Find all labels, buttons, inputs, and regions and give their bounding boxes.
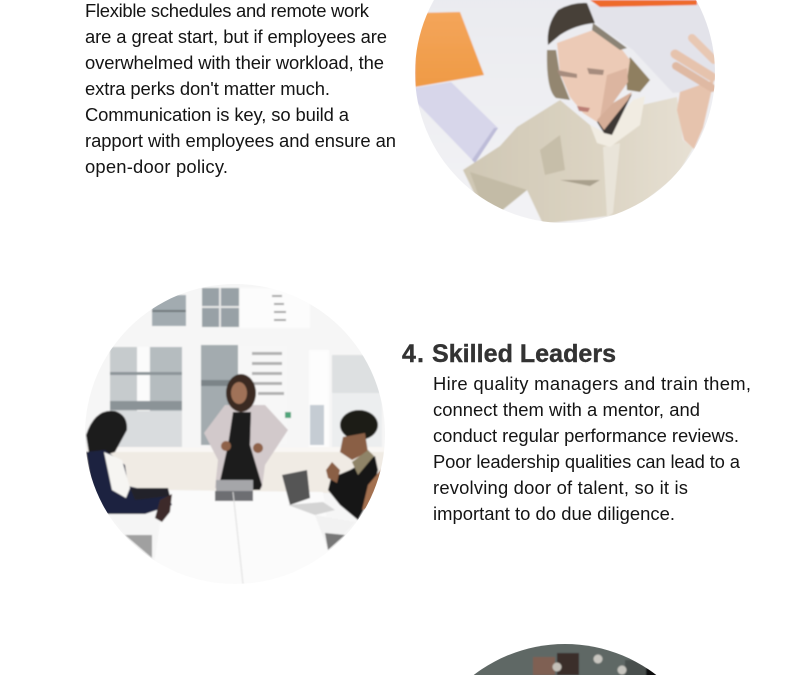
text block: workload paragraph: Communication is key, so build a bbox=[85, 104, 350, 125]
text block: skilled leaders paragraph: Poor leadership qualities can lead to a bbox=[433, 451, 741, 472]
face bbox=[557, 30, 630, 122]
woman left bbox=[86, 411, 127, 460]
text block: skilled leaders paragraph: important to do due diligence. bbox=[433, 503, 675, 524]
text block: workload paragraph: overwhelmed with their workload, the bbox=[85, 52, 384, 73]
photo: team meeting around a table bbox=[80, 280, 390, 600]
laptop bbox=[282, 470, 335, 515]
table bbox=[168, 490, 323, 494]
shirt bbox=[463, 97, 693, 224]
curls bbox=[626, 57, 650, 92]
heading: 4. Skilled Leaders: Skilled Leaders bbox=[432, 340, 616, 368]
hair bbox=[548, 3, 595, 45]
text block: workload paragraph: Flexible schedules and remote work bbox=[85, 0, 370, 21]
text block: workload paragraph: extra perks don't matter much. bbox=[85, 78, 330, 99]
collar bbox=[590, 96, 645, 147]
text block: skilled leaders paragraph: Hire quality managers and train them, bbox=[433, 373, 751, 394]
tablet bbox=[215, 480, 253, 501]
text block: skilled leaders paragraph: conduct regular performance reviews. bbox=[433, 425, 739, 446]
text block: skilled leaders paragraph: connect them with a mentor, and bbox=[433, 399, 700, 420]
photo: dark interior with lights (cut off at bottom) bbox=[474, 644, 656, 675]
text block: workload paragraph bbox=[85, 0, 396, 177]
woman standing bbox=[204, 405, 288, 488]
text block: workload paragraph: are a great start, but if employees are bbox=[85, 26, 387, 47]
hand and fingers bbox=[677, 80, 714, 149]
text block: skilled leaders paragraph: revolving door of talent, so it is bbox=[433, 477, 688, 498]
woman right bbox=[340, 410, 378, 440]
heading: 4. Skilled Leaders: 4. bbox=[402, 340, 424, 368]
photo: stressed man with papers bbox=[410, 0, 725, 230]
text block: workload paragraph: rapport with employees and ensure an bbox=[85, 130, 396, 151]
text block: workload paragraph: open-door policy. bbox=[85, 156, 228, 177]
text block: skilled leaders paragraph bbox=[433, 373, 751, 524]
